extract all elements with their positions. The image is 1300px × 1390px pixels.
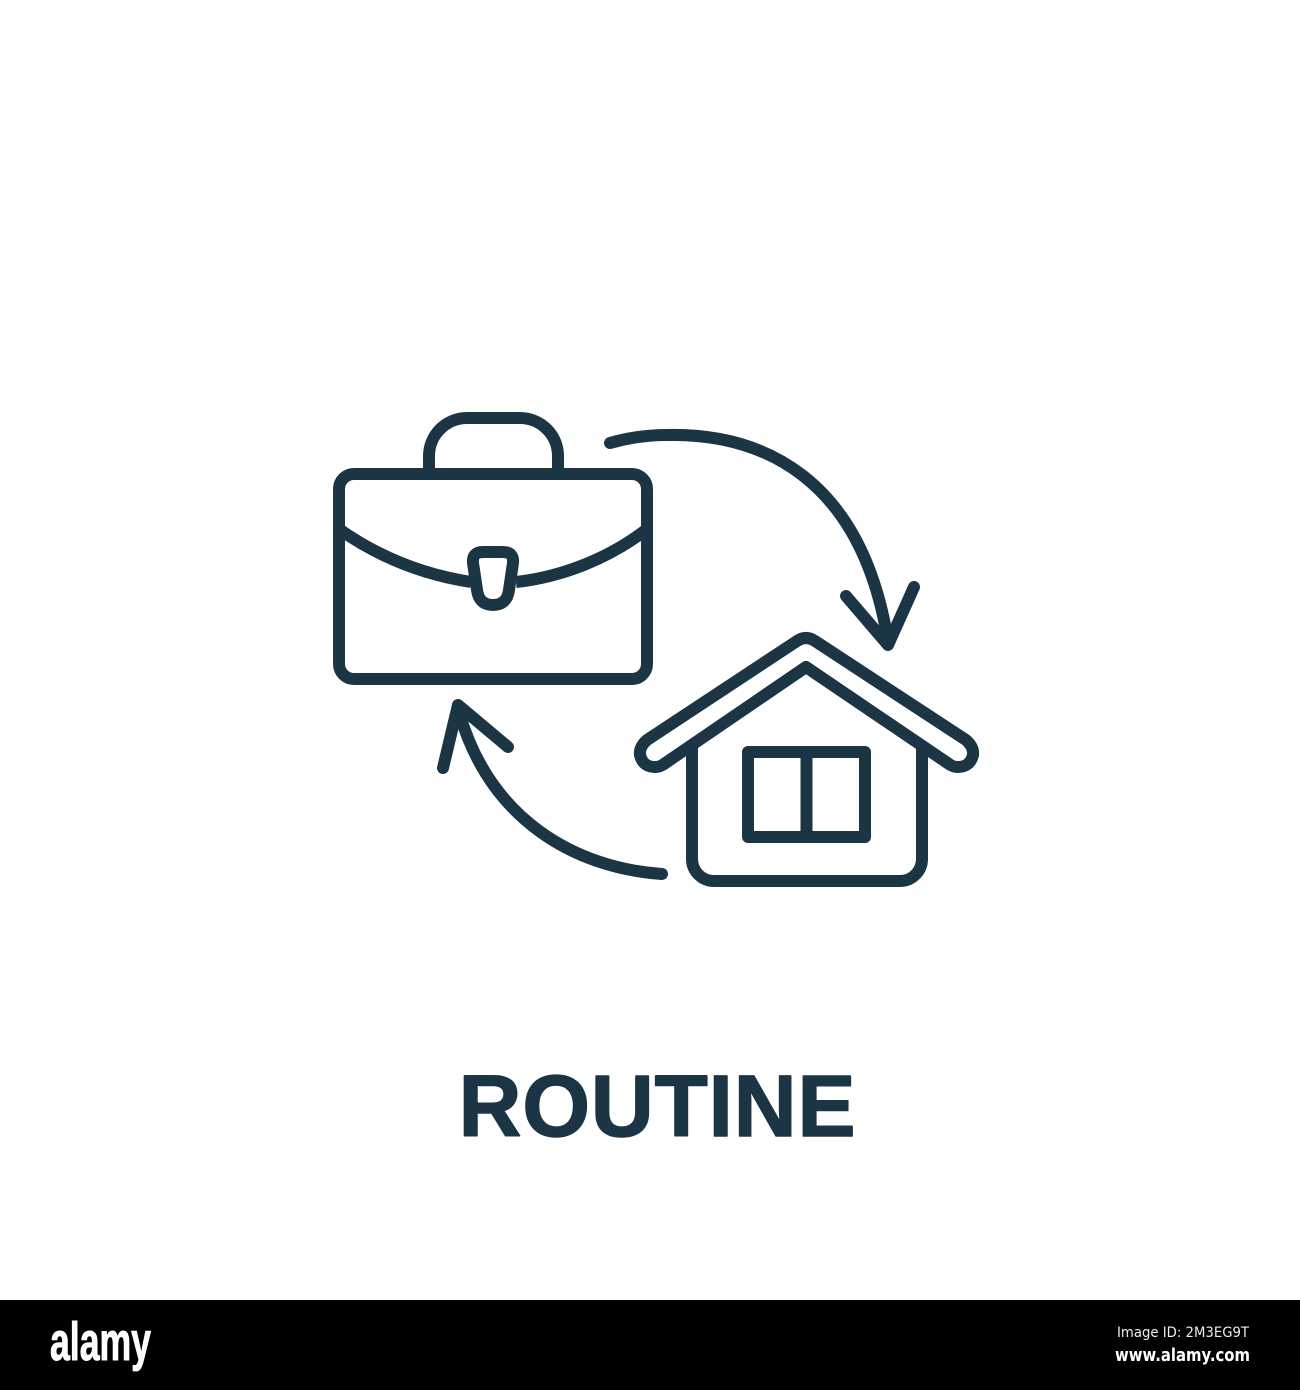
website: www.alamy.com xyxy=(1115,1345,1250,1366)
image id: Image ID: 2M3EG9T xyxy=(1117,1325,1249,1341)
icon: briefcase xyxy=(339,418,647,679)
watermark logo: alamy: alamy xyxy=(50,1312,151,1372)
icon: house xyxy=(640,638,973,881)
arrow: briefcase to house xyxy=(610,435,914,645)
title: ROUTINE xyxy=(459,1058,856,1155)
arrow: house to briefcase xyxy=(443,705,662,874)
icon: routine cycle xyxy=(339,418,973,881)
footer bar xyxy=(0,1300,1300,1390)
